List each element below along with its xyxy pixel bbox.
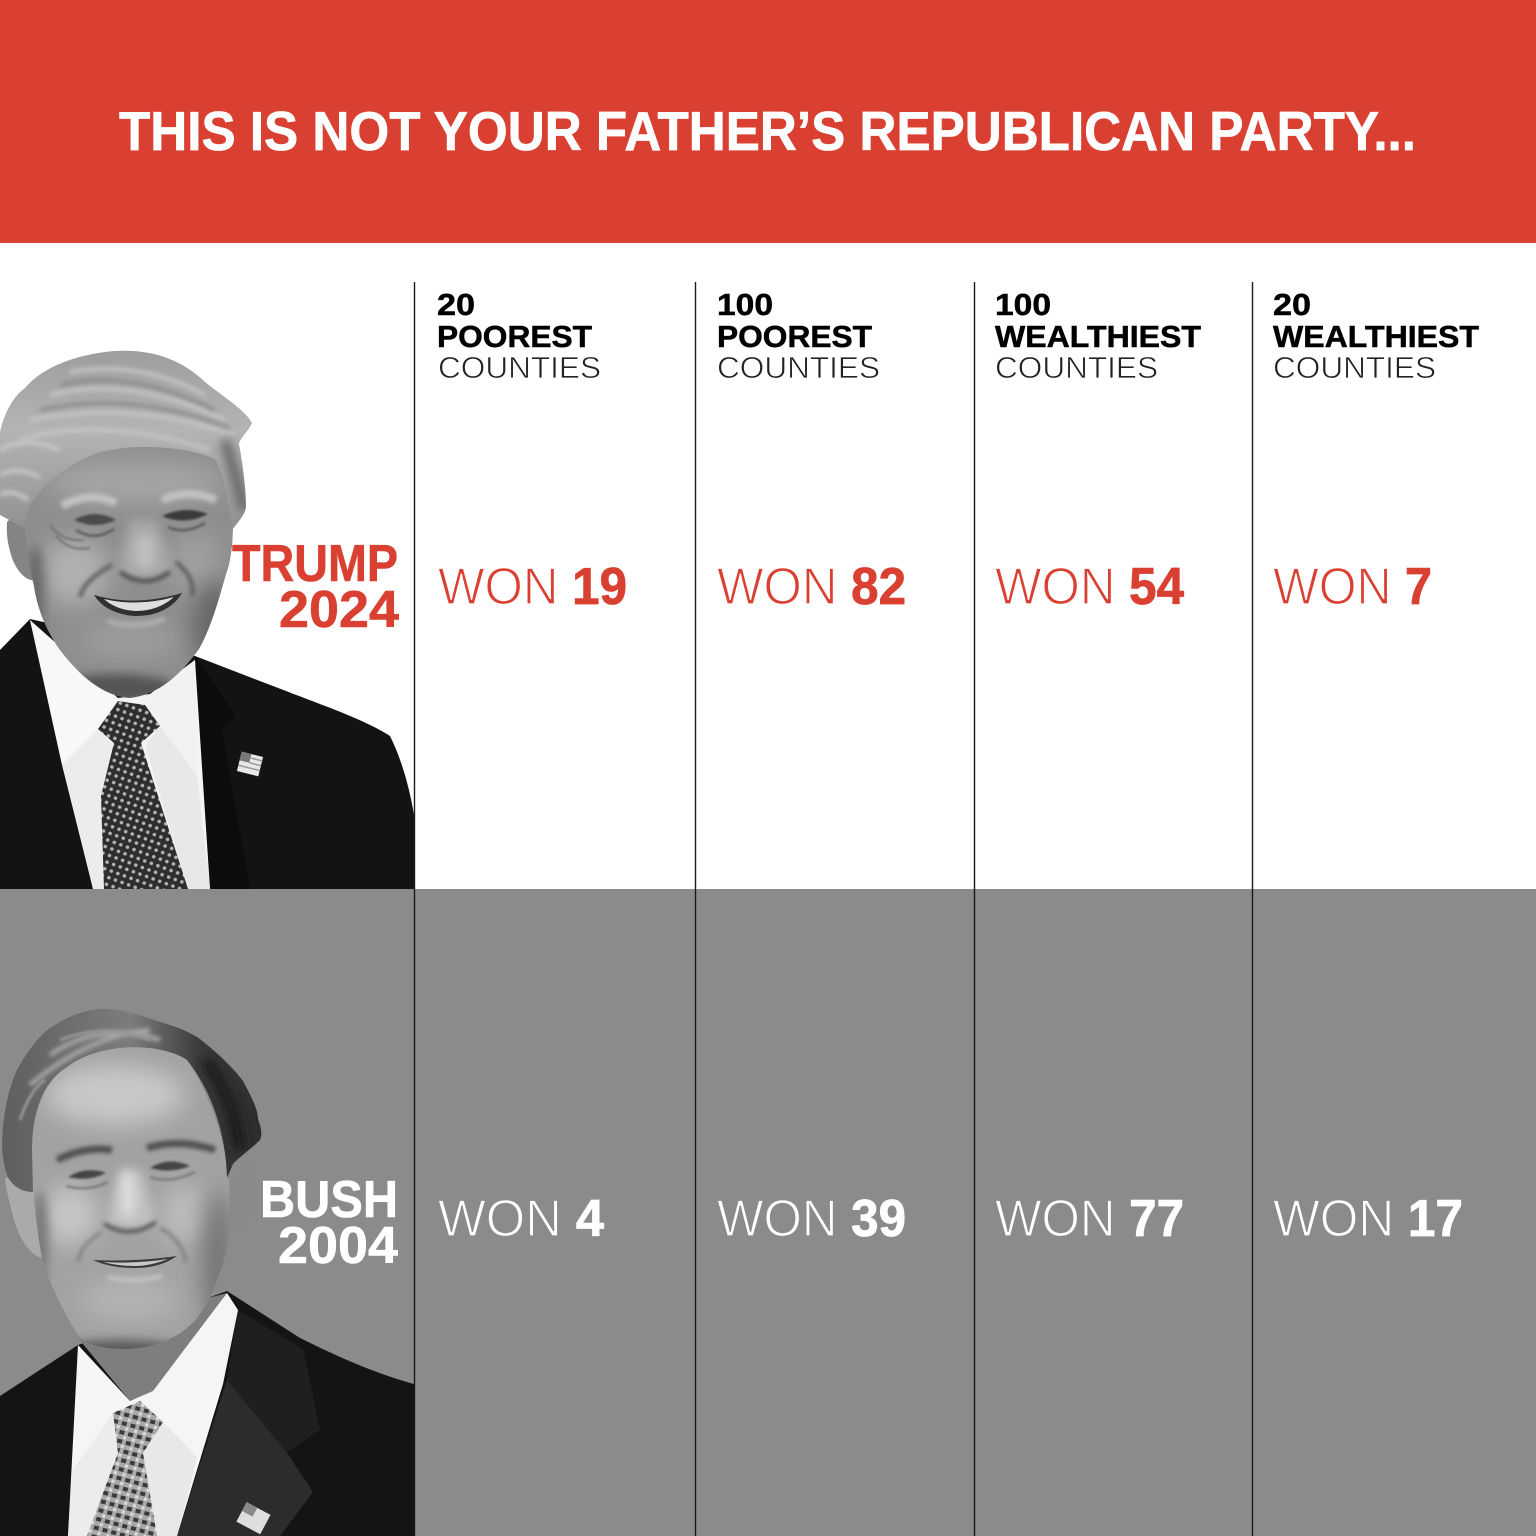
Bush: won 77: WON 77 bbox=[995, 1190, 1184, 1248]
column heading: 20 wealthiest counties: WEALTHIEST bbox=[1273, 319, 1479, 354]
nose bbox=[119, 520, 171, 580]
suit lapel bbox=[195, 656, 250, 889]
Bush results row bbox=[438, 1190, 1463, 1248]
hair bbox=[0, 1005, 262, 1195]
flag pin bbox=[237, 752, 263, 776]
column heading: 100 wealthiest counties bbox=[995, 287, 1201, 385]
ears bbox=[5, 1177, 42, 1258]
suit bbox=[0, 619, 414, 889]
column heading: 100 wealthiest counties: COUNTIES bbox=[995, 350, 1158, 385]
mouth bbox=[94, 593, 182, 616]
cheek wrinkles bbox=[50, 525, 90, 549]
column dividers bbox=[414, 282, 1252, 1536]
header banner bbox=[0, 0, 1536, 243]
column heading: 100 wealthiest counties: WEALTHIEST bbox=[995, 319, 1201, 354]
ears bbox=[7, 517, 36, 580]
tie bbox=[98, 701, 188, 889]
column heading: 100 poorest counties: COUNTIES bbox=[717, 350, 880, 385]
label: Bush 2004 bbox=[260, 1171, 398, 1275]
column heading: 20 poorest counties: POOREST bbox=[437, 319, 592, 354]
eyes bbox=[68, 1170, 106, 1179]
shirt bbox=[68, 1293, 238, 1536]
mouth bbox=[93, 1256, 177, 1268]
collar shadow bbox=[68, 1413, 120, 1536]
label: Bush 2004: BUSH bbox=[260, 1171, 398, 1229]
flag pin bbox=[236, 1502, 271, 1534]
lower lapel bbox=[177, 1380, 313, 1536]
shirt bbox=[30, 620, 210, 889]
column heading: 20 poorest counties: 20 bbox=[437, 287, 475, 322]
grey Bush row panel bbox=[0, 889, 1536, 1536]
column heading: 100 wealthiest counties: 100 bbox=[995, 287, 1051, 322]
Trump: won 54: WON 54 bbox=[995, 558, 1184, 616]
Bush: won 17: WON 17 bbox=[1273, 1190, 1463, 1248]
eyebrows bbox=[62, 497, 116, 506]
hair bbox=[0, 345, 260, 535]
Bush: won 4: WON 4 bbox=[438, 1190, 604, 1248]
column heading: 20 wealthiest counties: 20 bbox=[1273, 287, 1311, 322]
collar bbox=[30, 620, 118, 765]
Trump: won 7: WON 7 bbox=[1273, 558, 1432, 616]
neck bbox=[78, 1293, 227, 1401]
portrait: Trump bbox=[0, 345, 414, 889]
portrait: Bush bbox=[0, 1005, 414, 1536]
smile folds bbox=[80, 562, 193, 597]
Trump: won 82: WON 82 bbox=[717, 558, 906, 616]
eyebrows bbox=[57, 1149, 112, 1160]
label: Bush 2004: 2004 bbox=[278, 1217, 398, 1275]
Bush: won 39: WON 39 bbox=[717, 1190, 906, 1248]
face bbox=[32, 1047, 230, 1349]
column heading: 20 wealthiest counties bbox=[1273, 287, 1479, 385]
title: THIS IS NOT YOUR FATHER’S REPUBLICAN PARTY... bbox=[119, 100, 1416, 162]
column heading: 100 poorest counties: POOREST bbox=[717, 319, 872, 354]
column heading: 100 poorest counties: 100 bbox=[717, 287, 773, 322]
Trump results row bbox=[438, 558, 1432, 616]
face bbox=[24, 446, 233, 698]
column heading: 20 wealthiest counties: COUNTIES bbox=[1273, 350, 1436, 385]
upper lapel bbox=[227, 1310, 320, 1453]
label: Trump 2024 bbox=[232, 535, 399, 639]
suit bbox=[0, 1291, 414, 1536]
tie bbox=[87, 1401, 163, 1536]
smile folds bbox=[78, 1228, 186, 1262]
column heading: 20 poorest counties bbox=[437, 287, 601, 385]
eyes bbox=[74, 514, 116, 525]
label: Trump 2024: 2024 bbox=[279, 581, 399, 639]
Trump: won 19: WON 19 bbox=[438, 558, 627, 616]
column heading: 100 poorest counties bbox=[717, 287, 880, 385]
nose bbox=[106, 1170, 156, 1229]
column heading: 20 poorest counties: COUNTIES bbox=[438, 350, 601, 385]
label: Trump 2024: TRUMP bbox=[232, 535, 398, 593]
